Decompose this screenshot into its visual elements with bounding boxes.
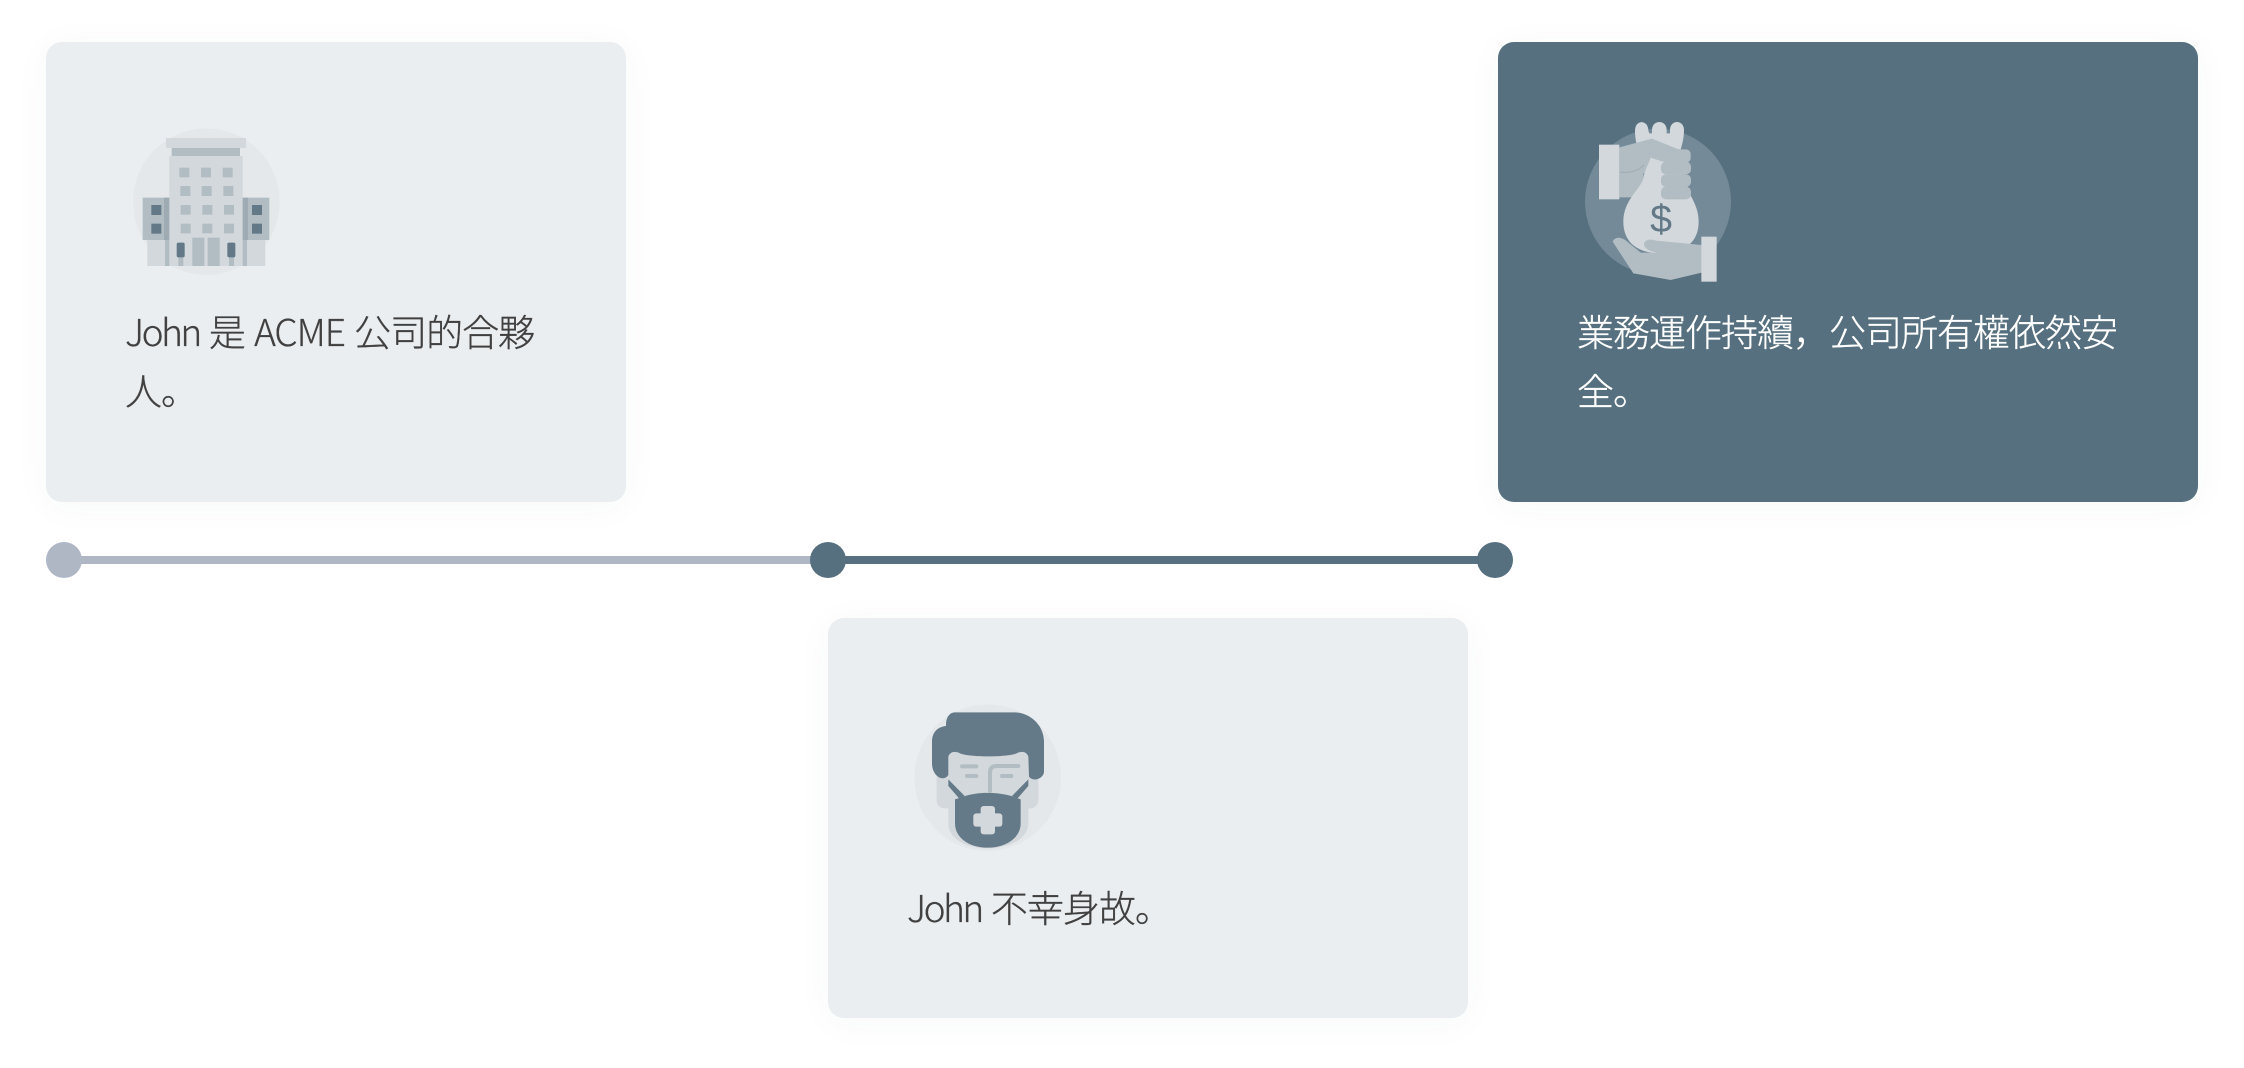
timeline segment: light xyxy=(64,556,828,564)
text: John passes away: John 不幸身故。 xyxy=(907,879,1171,933)
panel: John is partner xyxy=(46,42,626,502)
panel: business continues xyxy=(1498,42,2198,502)
text: John is partner: 人。 xyxy=(125,362,197,416)
text: business continues: 業務運作持續，公司所有權依然安 xyxy=(1577,303,2117,357)
text: John is partner xyxy=(125,303,534,416)
text: John is partner: John 是 ACME 公司的合夥 xyxy=(125,303,534,357)
icon: hands passing money bag xyxy=(1585,122,1731,282)
timeline dot: start xyxy=(46,542,82,578)
panel: John passes away xyxy=(828,618,1468,1018)
icon: man with medical mask xyxy=(932,712,1044,848)
text: business continues: 全。 xyxy=(1577,362,1649,416)
icon: hands passing money bag: $ xyxy=(1650,197,1672,241)
icon: office building xyxy=(142,138,270,266)
timeline segment: dark xyxy=(828,556,1495,564)
text: business continues xyxy=(1577,303,2117,416)
timeline dot: middle xyxy=(810,542,846,578)
timeline dot: end xyxy=(1477,542,1513,578)
